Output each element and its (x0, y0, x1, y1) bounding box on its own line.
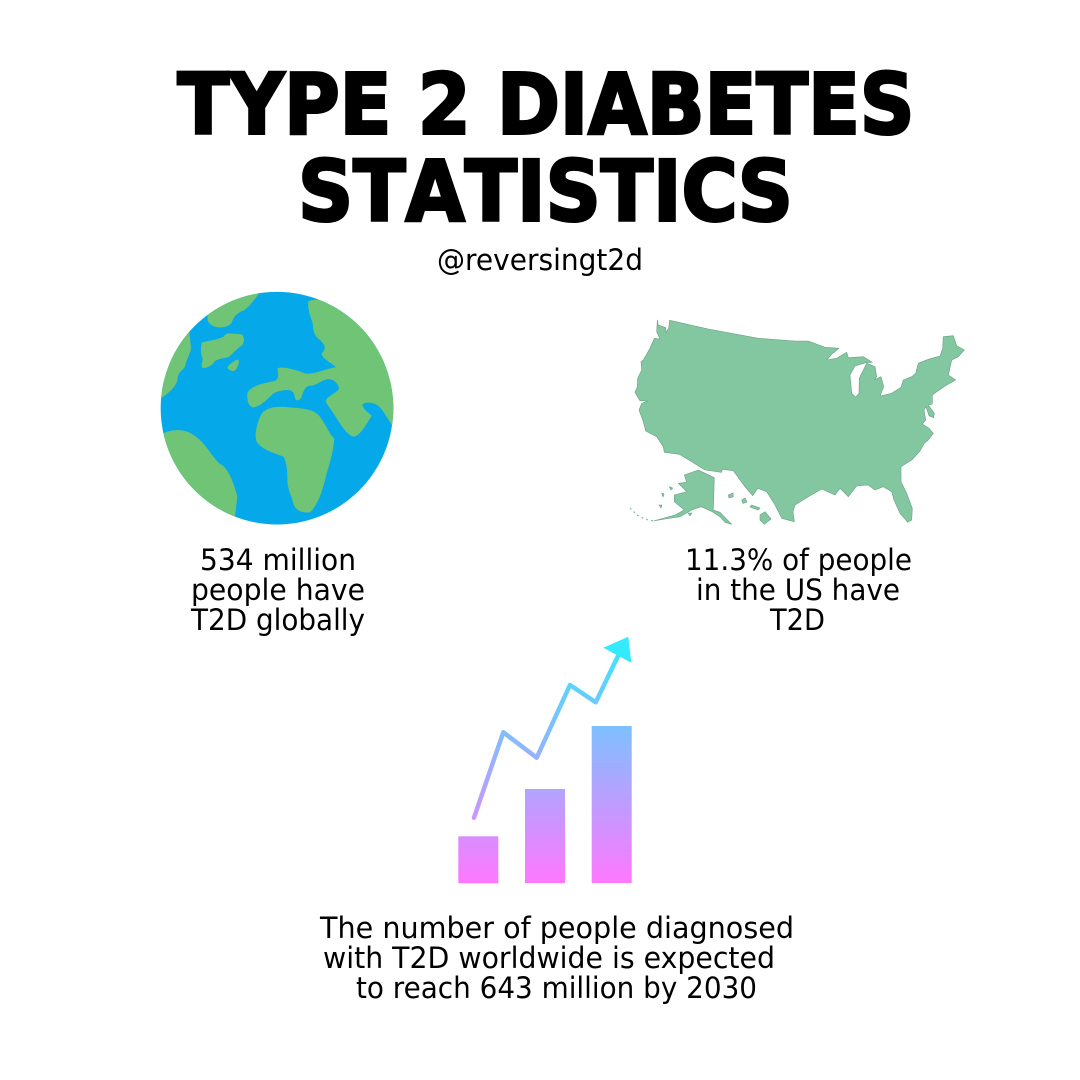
text: global stat: people have (191, 573, 365, 607)
bar 2 (525, 789, 565, 883)
text: 2030 projection (319, 911, 794, 1005)
title: STATISTICS (298, 142, 793, 240)
title (178, 56, 914, 240)
text: US stat (685, 543, 912, 637)
icon: globe (160, 292, 394, 524)
arrowhead (603, 637, 631, 663)
text: global stat: T2D globally (190, 603, 365, 637)
handle: @reversingt2d (437, 243, 643, 277)
text: US stat: in the US have (696, 573, 900, 607)
text: global stat: 534 million (200, 543, 356, 577)
chart: rising bars and arrow (458, 637, 632, 883)
icon: US map (630, 320, 964, 524)
trend line (474, 656, 618, 818)
text: 2030 projection: with T2D worldwide is expected (323, 941, 775, 975)
icon: Hawaii (659, 487, 771, 524)
text: global stat (190, 543, 365, 637)
title: TYPE 2 DIABETES (178, 56, 914, 154)
bar 3 (592, 726, 632, 883)
icon: Alaska (653, 470, 732, 524)
text: US stat: T2D (769, 603, 825, 637)
text: US stat: 11.3% of people (685, 543, 912, 577)
bar 1 (458, 836, 498, 883)
text: 2030 projection: The number of people diagnosed (319, 911, 794, 945)
text: 2030 projection: to reach 643 million by 2030 (356, 971, 757, 1005)
icon: Aleutian islands (630, 508, 653, 521)
